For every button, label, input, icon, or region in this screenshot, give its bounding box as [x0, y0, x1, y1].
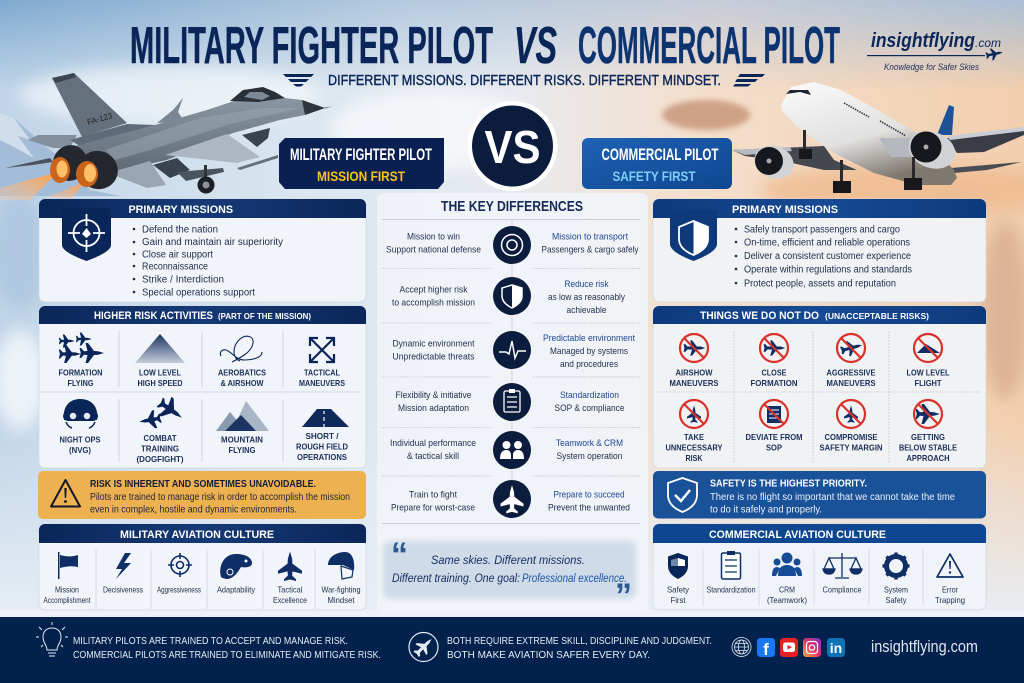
label: short rough field: OPERATIONS: [297, 452, 347, 462]
row: standardization: [396, 383, 624, 421]
badge: commercial pilot: SAFETY FIRST: [612, 168, 696, 184]
label: low level high speed: HIGH SPEED: [138, 378, 182, 388]
panel: military aviation culture: MILITARY AVIATION CULTURE: [120, 529, 274, 541]
fighter jet illustration: FA-123: [86, 111, 114, 127]
VS emblem: VS: [484, 121, 540, 173]
label: night ops: [60, 434, 101, 455]
label: close formation: CLOSE: [762, 368, 787, 378]
fighter jet illustration: [0, 73, 332, 200]
label: tactical maneuvers: MANEUVERS: [299, 378, 345, 388]
label: error trapping: Error: [942, 586, 958, 594]
label: compromise safety margin: COMPROMISE: [824, 432, 878, 442]
label: error trapping: [935, 586, 965, 605]
icon: warning triangle: [937, 554, 963, 577]
label: deviate from sop: SOP: [766, 442, 782, 452]
label: low level flight: [906, 368, 950, 388]
label: take unnecessary risk: RISK: [686, 453, 703, 463]
icon: facebook: [757, 638, 775, 659]
row: training: Prepare to succeed: [554, 490, 624, 500]
row: training: Train to fight: [409, 490, 457, 500]
footer message: both: BOTH REQUIRE EXTREME SKILL, DISCIPLINE AND JUDGMENT.: [447, 635, 712, 647]
row: risk: as low as reasonably: [548, 292, 625, 303]
label: war-fighting mindset: [322, 586, 361, 605]
badge: military fighter pilot: MISSION FIRST: [317, 168, 405, 184]
label: take unnecessary risk: UNNECESSARY: [666, 442, 723, 452]
row: standardization: Flexibility & initiative: [396, 390, 472, 401]
panel: primary missions, commercial: PRIMARY MISSIONS: [732, 204, 838, 216]
callout: safety is the highest priority: [653, 471, 986, 518]
logo: insightflying.com: .com: [975, 38, 1001, 50]
label: low level high speed: LOW LEVEL: [139, 368, 181, 378]
icon: linkedin: in: [830, 640, 842, 656]
icon: night vision helmet: [63, 399, 98, 428]
label: aerobatics and airshow: & AIRSHOW: [220, 378, 264, 388]
icon: mountain range: [216, 401, 269, 431]
label: airshow maneuvers: MANEUVERS: [670, 378, 719, 388]
label: war-fighting mindset: Mindset: [328, 596, 355, 605]
label: system safety: System: [884, 586, 908, 594]
icon: crosshair shield: [62, 208, 111, 261]
panel: primary missions, military: [39, 199, 366, 302]
row: mission: Support national defense: [386, 244, 481, 256]
footer message: risk: COMMERCIAL PILOTS ARE TRAINED TO ELIMINATE AND MITIGATE RISK.: [73, 649, 381, 661]
icon: plane in circle: [409, 632, 438, 662]
row: mission: Mission to transport: [552, 232, 628, 242]
row: risk: Reduce risk: [564, 279, 609, 290]
icon: fighter jet: [278, 552, 302, 581]
row: mission: [386, 226, 639, 264]
label: deviate from sop: DEVIATE FROM: [746, 432, 802, 442]
callout: risk is inherent: even in complex, hostile and dynamic environments.: [90, 505, 297, 516]
label: combat training: COMBAT: [144, 433, 177, 443]
row: teamwork: System operation: [556, 451, 622, 462]
row: teamwork: [390, 431, 623, 469]
mission list: Gain and maintain air superiority: [142, 237, 283, 248]
panel: things we do not do: THINGS WE DO NOT DO: [700, 310, 819, 322]
badge: commercial pilot: COMMERCIAL PILOT: [602, 145, 719, 164]
badge: military fighter pilot: MILITARY FIGHTER PILOT: [290, 145, 432, 164]
icon: no deviating from SOP: [760, 400, 788, 428]
label: mountain flying: [221, 434, 263, 455]
label: combat training: TRAINING: [141, 444, 179, 454]
label: short rough field: SHORT /: [306, 431, 339, 441]
icon: no close formation: [760, 334, 788, 362]
label: safety first: Safety: [667, 586, 690, 594]
mission list: Protect people, assets and reputation: [744, 278, 896, 290]
panel: primary missions, military: PRIMARY MISSIONS: [128, 204, 233, 216]
subtitle with wing marks: DIFFERENT MISSIONS. DIFFERENT RISKS. DIFFERENT MINDSET.: [328, 73, 721, 89]
label: crm teamwork: (Teamwork): [767, 596, 807, 605]
row: risk: [392, 277, 625, 316]
icon: flag: [58, 552, 78, 579]
label: mountain flying: MOUNTAIN: [221, 434, 263, 444]
badge: military fighter pilot: [279, 138, 444, 189]
label: close formation: [750, 368, 798, 388]
label: tactical excellence: [273, 586, 307, 605]
icon: no aggressive maneuvers: [837, 334, 865, 362]
icon: shield: [493, 277, 531, 315]
panel: commercial aviation culture: COMMERCIAL AVIATION CULTURE: [709, 529, 886, 541]
icon: no compromised margin: [837, 400, 865, 428]
badge: commercial pilot: [582, 138, 732, 189]
row: environment: Managed by systems: [550, 346, 628, 357]
label: compromise safety margin: [820, 432, 882, 452]
panel: higher risk activities: (PART OF THE MISSION): [218, 311, 311, 321]
quote box: Professional excellence.: [522, 571, 627, 585]
panel: things we do not do: (UNACCEPTABLE RISKS): [825, 311, 929, 321]
icon: scales: [823, 553, 862, 578]
label: aggressiveness: Aggressiveness: [157, 586, 201, 594]
icon: no unstable approach: [914, 400, 942, 428]
row: standardization: Mission adaptation: [398, 403, 469, 414]
icon: chameleon: [220, 554, 252, 579]
label: decisiveness: Decisiveness: [103, 586, 143, 594]
row: environment: and procedures: [560, 359, 618, 370]
panel: military aviation culture: [39, 524, 366, 610]
mission list: [133, 224, 283, 298]
row: environment: [392, 331, 635, 370]
label: tactical maneuvers: TACTICAL: [304, 368, 340, 378]
row: standardization: SOP & compliance: [554, 403, 624, 414]
row: mission: Mission to win: [407, 232, 460, 242]
airliner illustration: [732, 82, 1024, 193]
main title: VS: [514, 17, 557, 75]
label: close formation: FORMATION: [750, 378, 798, 388]
row: environment: Dynamic environment: [392, 338, 475, 350]
icon: shield: [670, 210, 717, 261]
VS emblem: [468, 101, 558, 191]
label: adaptability: Adaptability: [217, 586, 256, 594]
icon: no low level flight: [914, 334, 942, 362]
label: night ops: NIGHT OPS: [60, 434, 101, 444]
label: mission accomplishment: Mission: [55, 586, 79, 594]
icon: facebook: f: [763, 640, 769, 659]
label: aerobatics and airshow: [218, 368, 266, 388]
row: training: Prepare for worst-case: [391, 502, 475, 514]
icon: team: [772, 552, 802, 576]
row: risk: Accept higher risk: [400, 284, 468, 296]
icon: light bulb: [36, 622, 68, 656]
label: low level flight: LOW LEVEL: [906, 368, 950, 378]
footer band: [0, 617, 1024, 683]
icon: linkedin: [827, 638, 845, 657]
label: system safety: [884, 586, 908, 605]
icon: pulse: [493, 331, 531, 369]
label: system safety: Safety: [886, 596, 907, 605]
quote box: Same skies. Different missions.: [431, 553, 585, 567]
label: crm teamwork: CRM: [779, 586, 795, 594]
row: mission: Passengers & cargo safely: [542, 244, 639, 256]
icon: formation flying: [59, 332, 104, 363]
label: below stable approach: BELOW STABLE: [899, 442, 957, 452]
panel: higher risk activities: HIGHER RISK ACTIVITIES: [94, 310, 213, 322]
panel: things we do not do: [653, 306, 986, 468]
callout: risk is inherent: [38, 471, 366, 519]
label: aerobatics and airshow: AEROBATICS: [218, 368, 266, 378]
label: combat training: [136, 433, 184, 464]
mission list: Close air support: [142, 250, 213, 260]
label: take unnecessary risk: TAKE: [684, 432, 704, 442]
label: safety first: First: [670, 596, 686, 605]
icon: lightning: [116, 553, 131, 579]
label: deviate from sop: [746, 432, 802, 452]
label: tactical excellence: Tactical: [278, 586, 303, 594]
quote box: “: [391, 536, 408, 574]
panel: the key differences: [377, 193, 648, 615]
quote box: Different training. One goal:: [392, 571, 520, 585]
label: error trapping: Trapping: [935, 596, 965, 605]
row: risk: achievable: [566, 305, 606, 316]
logo: insightflying.com: insightflying: [871, 30, 975, 52]
mission list: Deliver a consistent customer experience: [744, 251, 911, 262]
label: below stable approach: APPROACH: [906, 453, 950, 463]
footer message: risk: [73, 635, 381, 661]
icon: crossed arrows: [310, 338, 334, 362]
icon: two people: [493, 431, 531, 469]
label: airshow maneuvers: [670, 368, 719, 388]
row: environment: Predictable environment: [543, 333, 635, 344]
logo: insightflying.com: [867, 30, 1004, 73]
icon: runway: [302, 409, 349, 427]
icon: dogfight jets: [138, 393, 188, 431]
label: aggressive maneuvers: MANEUVERS: [826, 378, 876, 388]
icon: target: [168, 553, 192, 577]
label: take unnecessary risk: [666, 432, 723, 463]
row: teamwork: Teamwork & CRM: [556, 438, 623, 449]
icon: globe: [732, 638, 751, 656]
label: combat training: (DOGFIGHT): [136, 454, 184, 464]
label: compromise safety margin: SAFETY MARGIN: [820, 442, 882, 452]
panel: commercial aviation culture: [653, 524, 986, 610]
mission list: Special operations support: [142, 288, 255, 298]
row: teamwork: Individual performance: [390, 438, 476, 449]
panel: primary missions, commercial: [653, 199, 986, 302]
row: training: [391, 480, 630, 518]
row: risk: to accomplish mission: [392, 298, 475, 308]
label: mountain flying: FLYING: [228, 445, 256, 455]
label: standardization: Standardization: [706, 586, 756, 594]
row: teamwork: & tactical skill: [407, 451, 459, 462]
icon: no airshow: [680, 334, 708, 362]
icon: mountain: [135, 334, 185, 363]
footer message: both: BOTH MAKE AVIATION SAFER EVERY DAY.: [447, 649, 650, 661]
icon: safety shield: [668, 553, 688, 579]
label: tactical excellence: Excellence: [273, 596, 307, 605]
label: night ops: (NVG): [69, 445, 91, 455]
quote box: ”: [615, 577, 632, 615]
icon: jet: [493, 480, 531, 518]
icon: target: [493, 226, 531, 264]
icon: gear: [882, 552, 910, 580]
mission list: Reconnaissance: [142, 262, 208, 272]
label: tactical maneuvers: [299, 368, 345, 388]
mission list: Operate within regulations and standards: [744, 264, 912, 276]
footer message: both: [447, 635, 712, 661]
label: formation flying: FLYING: [68, 378, 94, 388]
mission list: Strike / Interdiction: [142, 274, 224, 286]
main title: MILITARY FIGHTER PILOT: [130, 17, 493, 75]
row: training: Prevent the unwanted: [548, 502, 630, 514]
icon: no unnecessary risk: [680, 400, 708, 428]
label: safety first: [667, 586, 690, 605]
icon: instagram: [803, 638, 821, 657]
label: airshow maneuvers: AIRSHOW: [676, 368, 713, 378]
label: crm teamwork: [767, 586, 807, 605]
label: short rough field: ROUGH FIELD: [296, 442, 348, 452]
label: low level flight: FLIGHT: [914, 378, 942, 388]
panel: higher risk activities: [39, 306, 366, 468]
mission list: On-time, efficient and reliable operations: [744, 238, 910, 248]
icon: checklist: [722, 551, 740, 579]
logo: insightflying.com: Knowledge for Safer Skies: [884, 62, 979, 73]
label: short rough field: [296, 431, 348, 462]
label: war-fighting mindset: War-fighting: [322, 586, 361, 594]
label: mission accomplishment: Accomplishment: [44, 596, 91, 605]
label: formation flying: [58, 368, 102, 388]
label: low level high speed: [138, 368, 182, 388]
row: standardization: Standardization: [560, 390, 619, 401]
label: formation flying: FORMATION: [58, 368, 102, 378]
callout: safety is the highest priority: SAFETY IS THE HIGHEST PRIORITY.: [710, 478, 867, 490]
quote box: [383, 536, 636, 615]
label: below stable approach: GETTING: [911, 432, 945, 442]
heading: the key differences: THE KEY DIFFERENCES: [441, 198, 583, 215]
label: aggressive maneuvers: [826, 368, 876, 388]
label: compliance: Compliance: [822, 586, 862, 594]
callout: safety is the highest priority: There is no flight so important that we cannot take the time: [710, 492, 955, 503]
icon: aerobatic loop: [220, 336, 262, 362]
icon: helmet: [328, 552, 354, 579]
icon: youtube: [780, 638, 798, 657]
icon: check shield: [668, 478, 697, 512]
label: mission accomplishment: [44, 586, 91, 605]
mission list: [735, 224, 912, 290]
callout: safety is the highest priority: to do it safely and properly.: [710, 504, 822, 516]
website address: insightflying.com: [871, 637, 978, 656]
icon: warning triangle: [51, 480, 80, 506]
mission list: Safely transport passengers and cargo: [744, 224, 900, 236]
icon: clipboard: [493, 383, 531, 421]
label: aggressive maneuvers: AGGRESSIVE: [826, 368, 876, 378]
row: environment: Unpredictable threats: [392, 352, 475, 362]
callout: risk is inherent: Pilots are trained to manage risk in order to accomplish the mission: [90, 492, 350, 503]
label: below stable approach: [899, 432, 957, 463]
footer message: risk: MILITARY PILOTS ARE TRAINED TO ACCEPT AND MANAGE RISK.: [73, 635, 348, 647]
callout: risk is inherent: RISK IS INHERENT AND SOMETIMES UNAVOIDABLE.: [90, 478, 316, 490]
mission list: Defend the nation: [142, 224, 218, 236]
